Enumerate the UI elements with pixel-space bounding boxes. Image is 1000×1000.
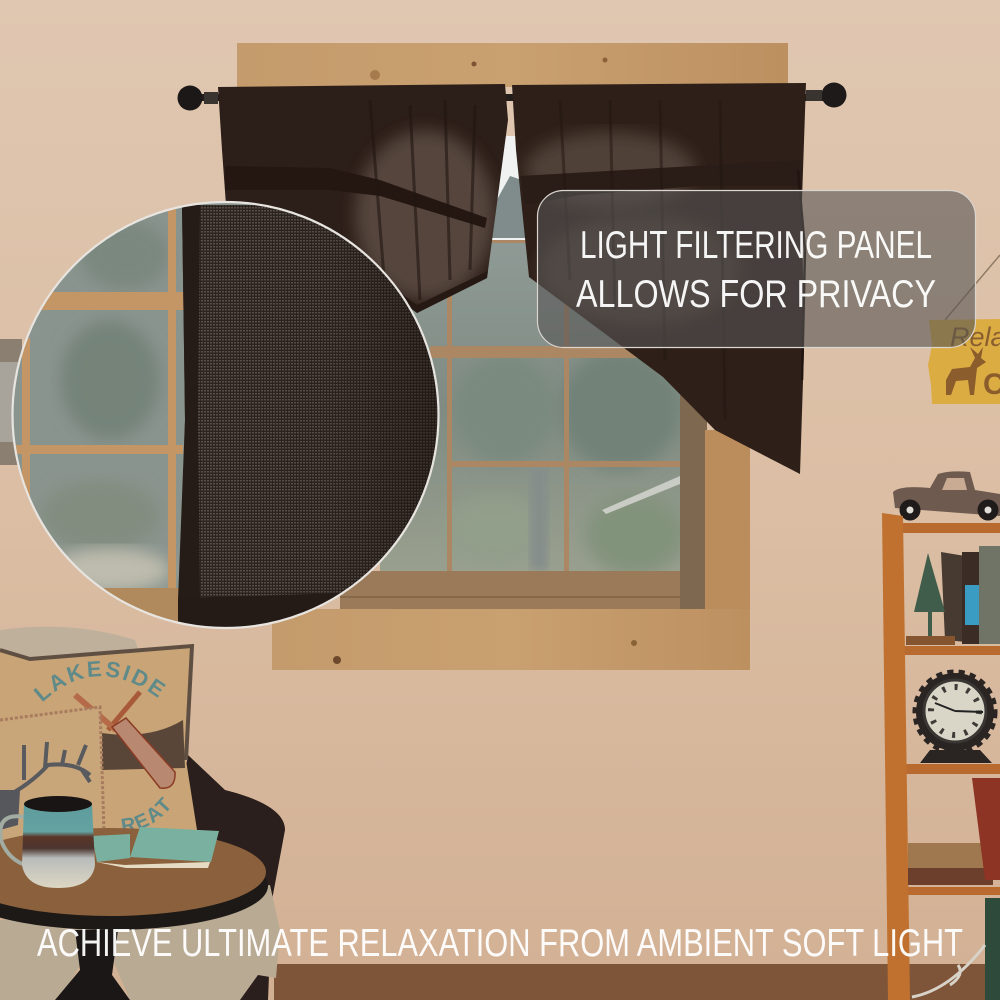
pillow: elk <box>0 707 104 850</box>
throw blanket top <box>0 627 142 660</box>
lens lower-left wall <box>0 540 105 640</box>
lens fabric closeup <box>178 205 445 632</box>
canoe <box>102 720 185 770</box>
left ruched band <box>251 166 487 228</box>
small tree <box>906 553 955 645</box>
window glass with forest <box>380 240 685 575</box>
zoom lens circle <box>0 200 445 640</box>
pillow text: LAKESIDE <box>34 661 166 702</box>
deer <box>946 347 986 395</box>
callout text: ALLOWS FOR PRIVACY <box>576 273 936 316</box>
curtain swags <box>210 80 810 480</box>
throw blanket lower <box>0 885 280 1000</box>
upright books <box>941 546 1000 644</box>
right jamb <box>680 385 707 611</box>
window <box>237 43 788 670</box>
pillow: Lakeside: REAT <box>122 796 170 829</box>
paddles <box>108 692 140 730</box>
armchair <box>180 755 285 1000</box>
top wood board <box>237 43 788 87</box>
clock <box>916 673 994 763</box>
bright gap between panels <box>488 136 530 240</box>
wall sign: deer <box>928 255 1000 404</box>
floor <box>274 964 1000 1000</box>
right ruched band <box>520 166 702 202</box>
callout text <box>576 224 936 316</box>
bottom books <box>908 778 1000 1000</box>
right panel <box>505 80 810 480</box>
lens background forest <box>14 203 254 588</box>
bottom wood trim <box>272 609 750 670</box>
mug <box>0 796 95 888</box>
side table <box>0 828 268 1000</box>
lens sash bars <box>15 205 184 595</box>
callout panel <box>538 190 976 348</box>
toy truck <box>893 471 1000 520</box>
right wood trim <box>705 430 750 612</box>
bookshelf <box>882 513 1000 1000</box>
antler <box>912 945 985 997</box>
wall plate at left edge <box>0 339 22 465</box>
lens sill <box>103 588 178 622</box>
right pleats <box>560 124 664 196</box>
left panel <box>218 84 508 313</box>
window muntins <box>430 238 680 575</box>
curtain rod <box>178 82 846 110</box>
left sheer glow <box>355 130 495 300</box>
left hem <box>402 271 488 313</box>
side tie <box>798 170 805 380</box>
open book <box>92 827 219 868</box>
left pleats <box>372 120 476 300</box>
window sill <box>340 571 708 611</box>
right sheer glow <box>525 132 695 208</box>
pillow: Lakeside <box>0 644 197 830</box>
